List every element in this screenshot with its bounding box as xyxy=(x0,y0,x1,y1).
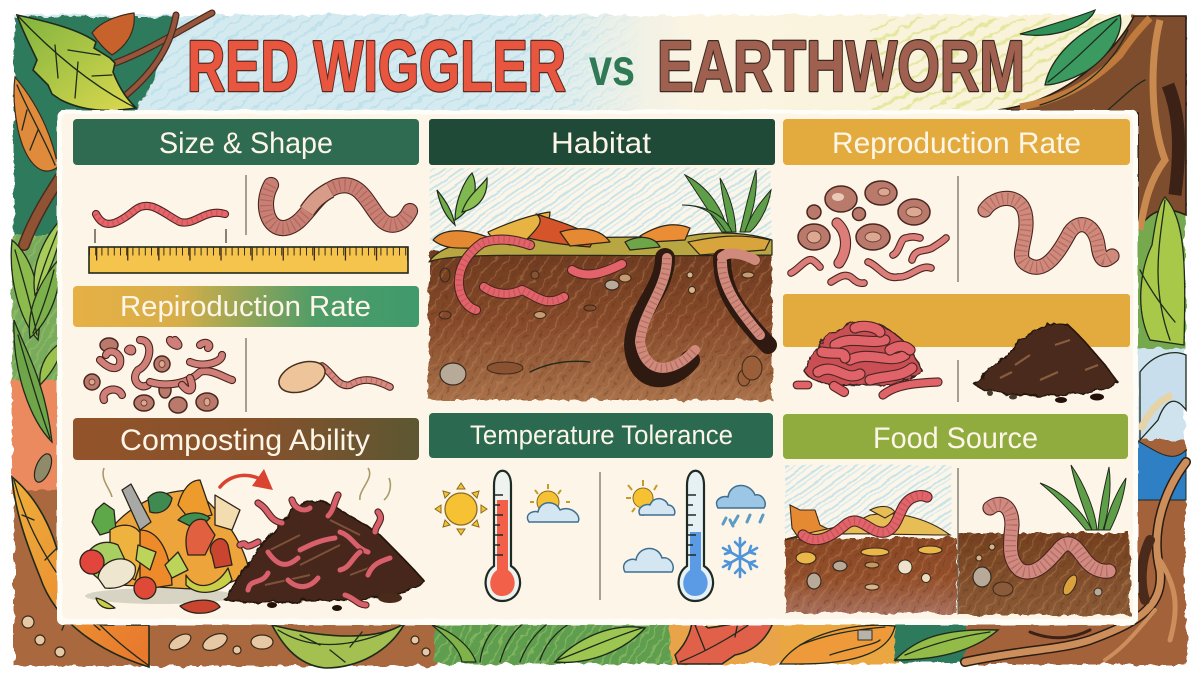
icon: leaf litter on soil xyxy=(785,505,950,564)
border base: bottom strip xyxy=(14,618,1187,666)
panel: temperature tolerance xyxy=(429,413,773,601)
title xyxy=(187,27,1025,107)
icon: snowflake xyxy=(723,538,757,577)
icon: grass tuft xyxy=(1040,465,1126,530)
icon: adult earthworm xyxy=(985,198,1112,267)
icon: red worms in soil xyxy=(459,239,622,310)
icon: orange back leaf xyxy=(92,13,134,55)
heading: size and shape: Size & Shape xyxy=(159,127,333,160)
icon: earthworm burrowing xyxy=(990,504,1109,572)
icon: rain cloud xyxy=(717,485,765,526)
icon: seedling xyxy=(437,173,487,225)
habitat scene: soil xyxy=(429,252,772,400)
heading: habitat xyxy=(429,119,775,165)
heading: reproduction rate: Reproduction Rate xyxy=(832,127,1081,160)
icon: food scrap pile xyxy=(80,480,250,613)
panel: size and shape xyxy=(73,119,419,273)
icon: pile of red worms xyxy=(797,322,938,395)
icon: water and stones right xyxy=(1136,353,1186,500)
icon: sun xyxy=(435,483,487,535)
icon: seed xyxy=(31,451,55,485)
heading: repiroduction rate xyxy=(73,286,419,327)
food scene: stones xyxy=(807,544,1102,597)
icon: orange leaves bottom xyxy=(780,625,895,664)
heading: repiroduction rate: Repiroduction Rate xyxy=(120,291,371,323)
heading: temperature tolerance: Temperature Tolerance xyxy=(470,420,733,450)
icon: green leaves top right xyxy=(1020,10,1121,85)
arrow: food to compost xyxy=(220,469,273,490)
icon: green leaf bottom xyxy=(272,623,405,668)
icon: big green leaf top left xyxy=(17,15,136,110)
panel: food source xyxy=(783,414,1130,615)
heading: size and shape xyxy=(73,119,419,165)
soil pebbles xyxy=(439,268,762,386)
icon: grass tuft xyxy=(682,170,771,232)
icon: plain cloud xyxy=(624,548,673,572)
border base: right column xyxy=(1133,16,1186,665)
steam xyxy=(103,468,390,500)
branches top left xyxy=(24,13,212,245)
icon: compost heap xyxy=(975,324,1118,403)
white halo around main panel xyxy=(57,110,1138,625)
icon: earthworms in burrows xyxy=(634,254,768,377)
icon: cluster of cocoons and baby worms xyxy=(84,338,232,413)
border base: top sky band xyxy=(14,12,1182,111)
heading: composting ability xyxy=(73,418,419,460)
panel: composting ability xyxy=(73,418,425,613)
icon: partly sunny cloud xyxy=(527,484,579,522)
icon: cocoon with worm xyxy=(275,356,390,398)
heading: reproduction rate xyxy=(783,119,1130,165)
icon: red leaf bottom xyxy=(675,602,778,664)
habitat scene: sky hatching xyxy=(430,168,771,258)
icon: green plant right xyxy=(1140,197,1185,345)
heading: food source xyxy=(783,414,1128,459)
icon: ruler xyxy=(89,229,408,273)
border base: left column xyxy=(12,17,175,665)
cream main panel xyxy=(62,114,1133,619)
food scene: sky hatching xyxy=(785,465,951,535)
blank yellow heading bar xyxy=(783,294,1130,347)
soil pebbles bottom left xyxy=(22,616,430,657)
panel: reproduction rate left xyxy=(73,286,419,413)
title: earthworm: EARTHWORM xyxy=(657,27,1025,107)
panel: reproduction rate right xyxy=(783,119,1130,283)
heading: composting ability: Composting Ability xyxy=(120,424,370,457)
icon: hot thermometer xyxy=(486,471,520,601)
title: red wiggler: RED WIGGLER xyxy=(187,27,566,107)
roots bottom right xyxy=(965,462,1186,662)
panel: composting pile comparison xyxy=(783,294,1130,403)
icon: orange leaf left xyxy=(14,77,58,171)
heading: temperature tolerance xyxy=(429,413,773,458)
icon: compost pile with worms xyxy=(225,495,425,611)
tree trunk and roots right xyxy=(998,16,1186,230)
title: vs: vs xyxy=(589,39,635,97)
heading: food source: Food Source xyxy=(873,422,1038,455)
icon: cold thermometer xyxy=(679,471,713,601)
heading: habitat: Habitat xyxy=(551,127,652,160)
icon: green leaf bottom right xyxy=(895,630,998,660)
icon: big earthworm xyxy=(266,185,410,228)
icon: leaf litter xyxy=(429,212,772,262)
icon: cocoons and young worms xyxy=(791,181,946,283)
icon: big orange leaf bottom left xyxy=(12,477,149,667)
icon: small red wiggler xyxy=(96,206,225,224)
panel: habitat xyxy=(429,119,775,400)
icon: red wiggler feeding xyxy=(803,496,927,540)
icon: green leaves left xyxy=(11,215,65,442)
icon: right sun and cloud xyxy=(626,480,675,516)
icon: grass bottom xyxy=(432,622,645,662)
food scene: soil left and right xyxy=(785,533,1130,615)
